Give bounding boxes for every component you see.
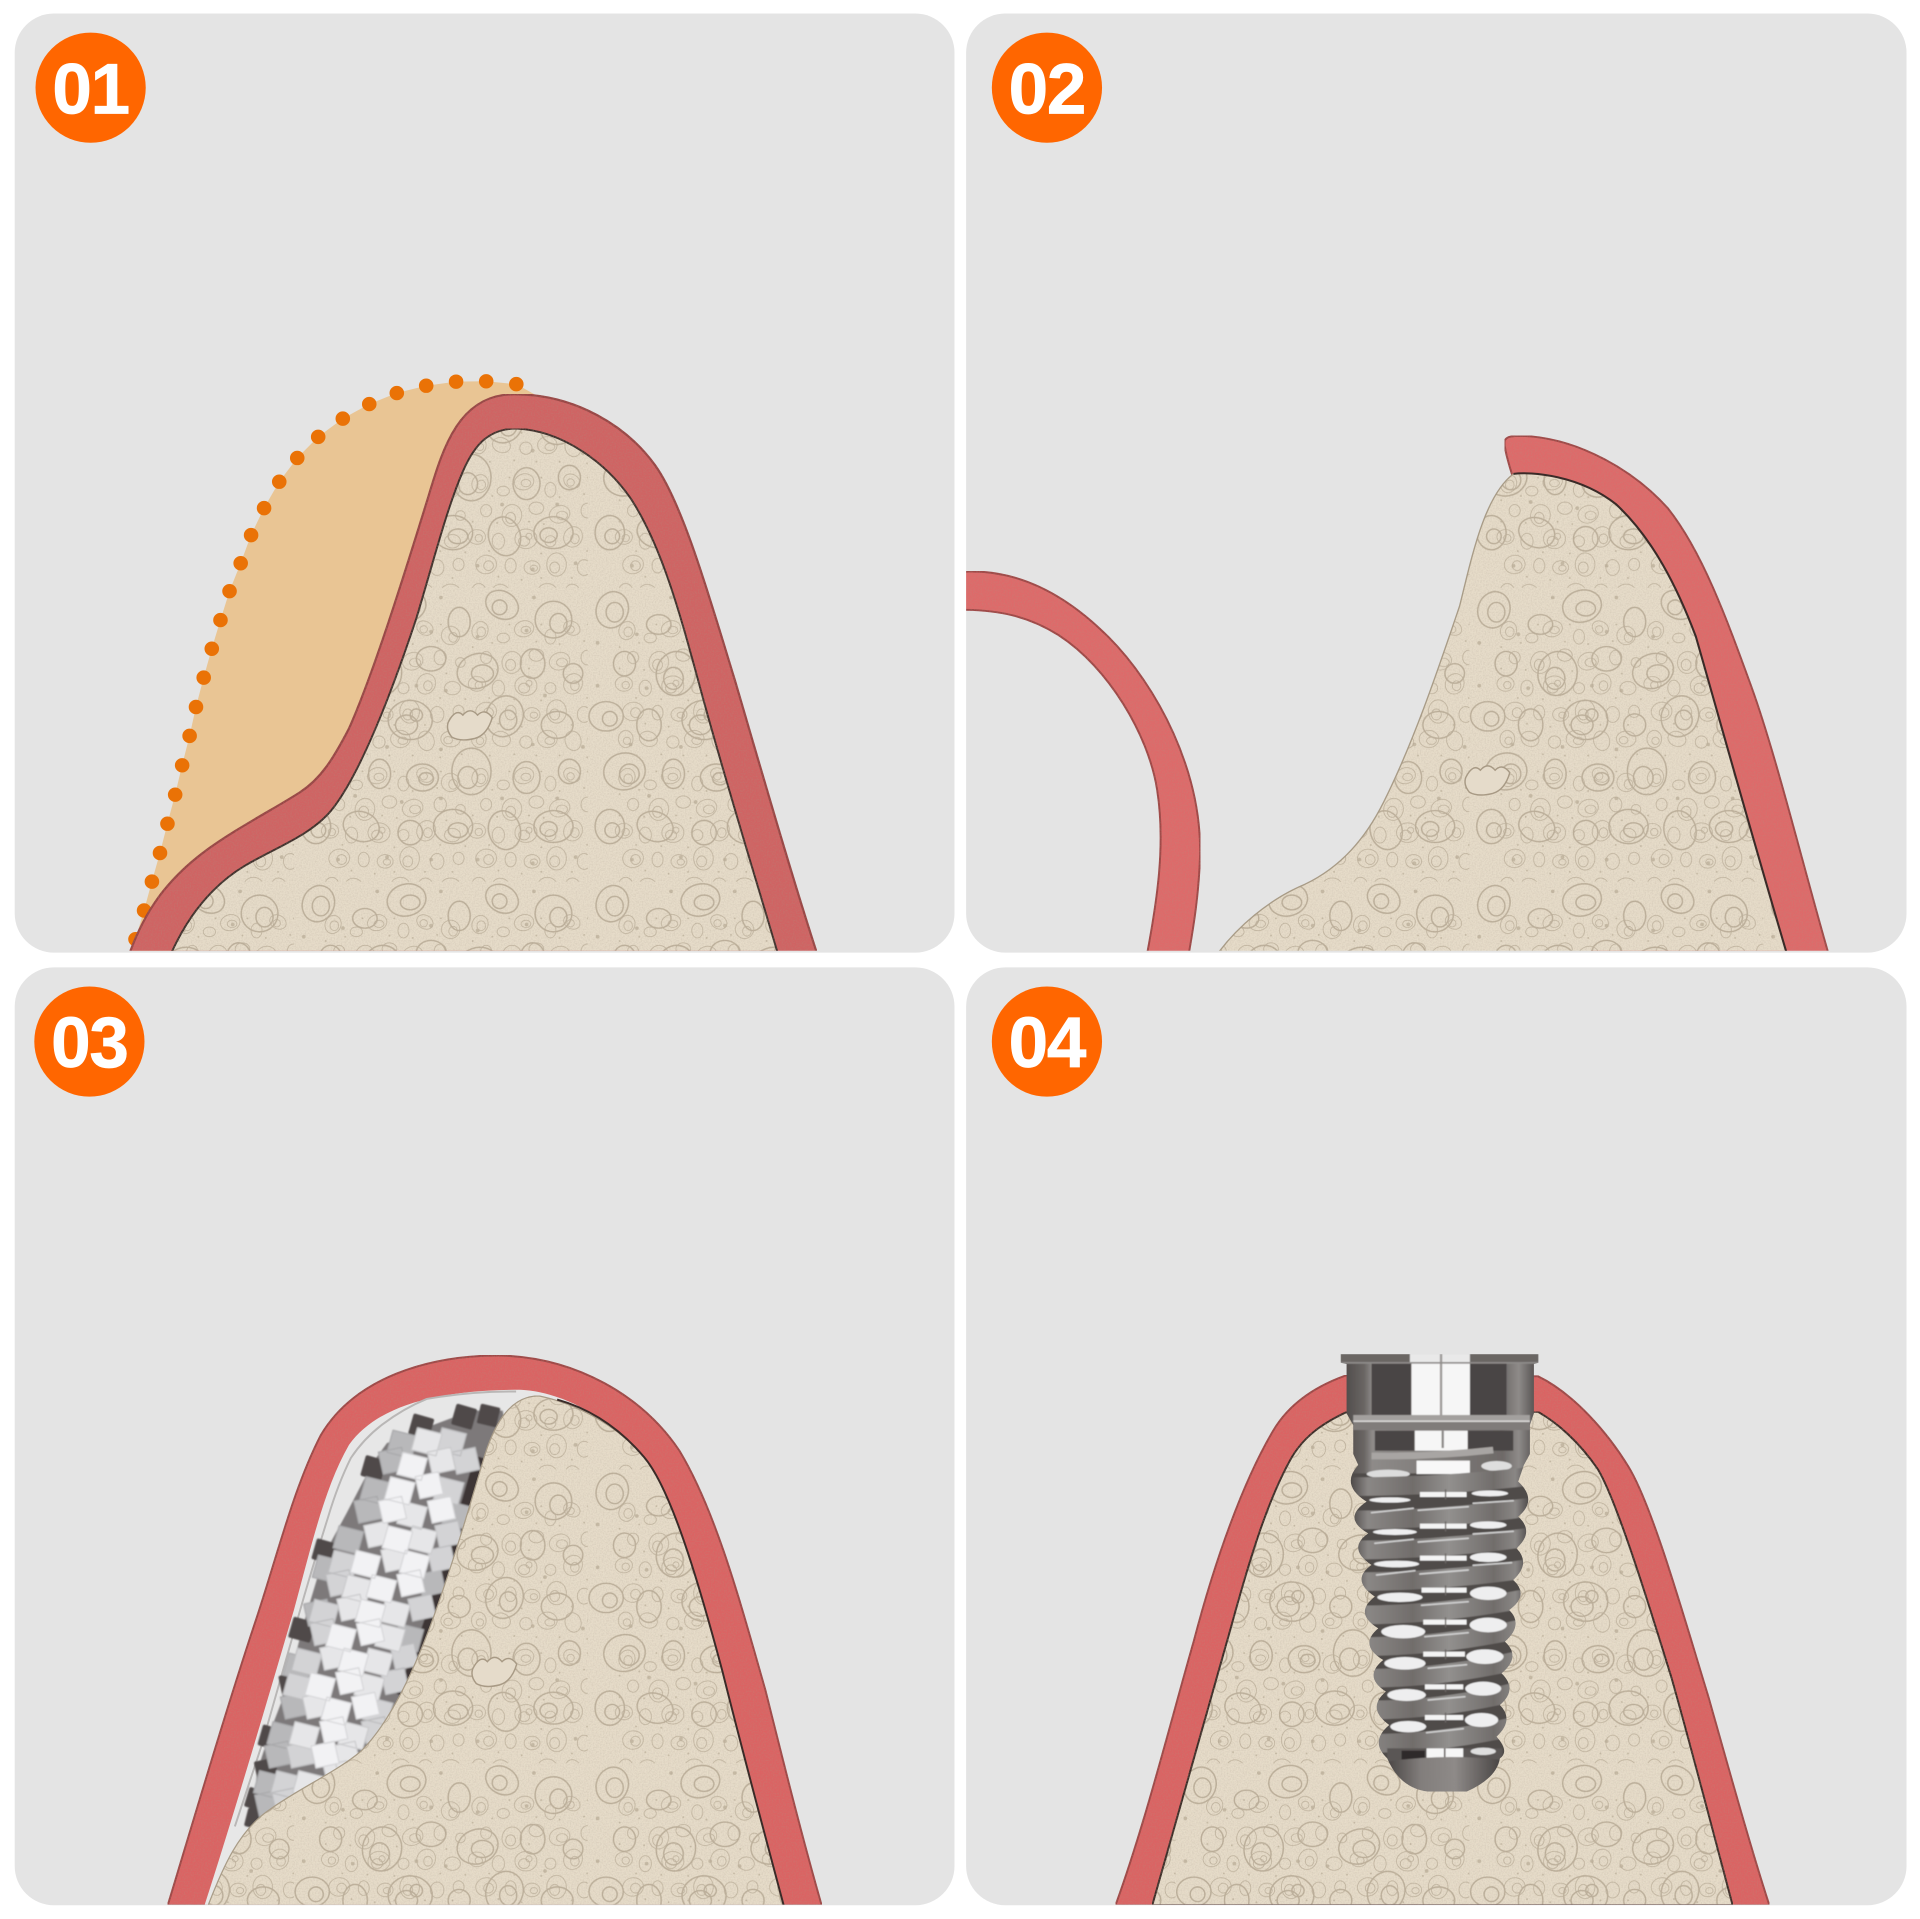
bone cavity detail bbox=[1465, 766, 1510, 795]
step badge 01 bbox=[36, 33, 146, 143]
gum tissue bbox=[168, 1355, 822, 1905]
dental implant bbox=[1341, 1354, 1539, 1793]
reflected left gum flap bbox=[961, 571, 1200, 953]
bone to gum contact shadow bbox=[557, 1400, 784, 1905]
panel 3 background bbox=[15, 967, 954, 1905]
step badge 04: 04 bbox=[1009, 1004, 1087, 1083]
bone cavity detail bbox=[472, 1657, 517, 1686]
step badge 02 bbox=[992, 33, 1102, 143]
step badge 03 bbox=[34, 986, 144, 1097]
right gum flap bbox=[1505, 436, 1828, 953]
exposed bone bbox=[1218, 473, 1787, 953]
bone bbox=[1152, 1412, 1733, 1905]
space under the gum bbox=[204, 1390, 600, 1905]
panel 1 background bbox=[15, 13, 954, 953]
gum tissue bbox=[130, 394, 817, 953]
bone bbox=[171, 429, 778, 953]
augmentation outline: dotted orange line bbox=[135, 381, 516, 939]
gum tissue bbox=[1116, 1375, 1769, 1905]
bone to gum contact shadow bbox=[1513, 473, 1787, 953]
panel 1: original ridge with planned augmentation bbox=[15, 13, 954, 953]
barrier membrane line bbox=[235, 1391, 516, 1826]
step badge 04 bbox=[992, 986, 1102, 1097]
bone graft particles bbox=[246, 1406, 514, 1828]
step badge 01: 01 bbox=[52, 50, 129, 129]
bone cavity detail bbox=[447, 711, 492, 740]
augmentation zone: orange fill bbox=[132, 381, 539, 953]
step badge 03: 03 bbox=[51, 1004, 128, 1083]
step badge 02: 02 bbox=[1009, 50, 1085, 129]
panel 2 background bbox=[966, 13, 1907, 953]
bone bbox=[208, 1396, 784, 1905]
panel 2: flap raised exposing bone bbox=[961, 13, 1907, 953]
panel 4 background bbox=[966, 967, 1907, 1905]
panel 4: implant placed in regenerated bone bbox=[966, 967, 1907, 1905]
panel 3: bone graft under membrane bbox=[15, 967, 954, 1905]
